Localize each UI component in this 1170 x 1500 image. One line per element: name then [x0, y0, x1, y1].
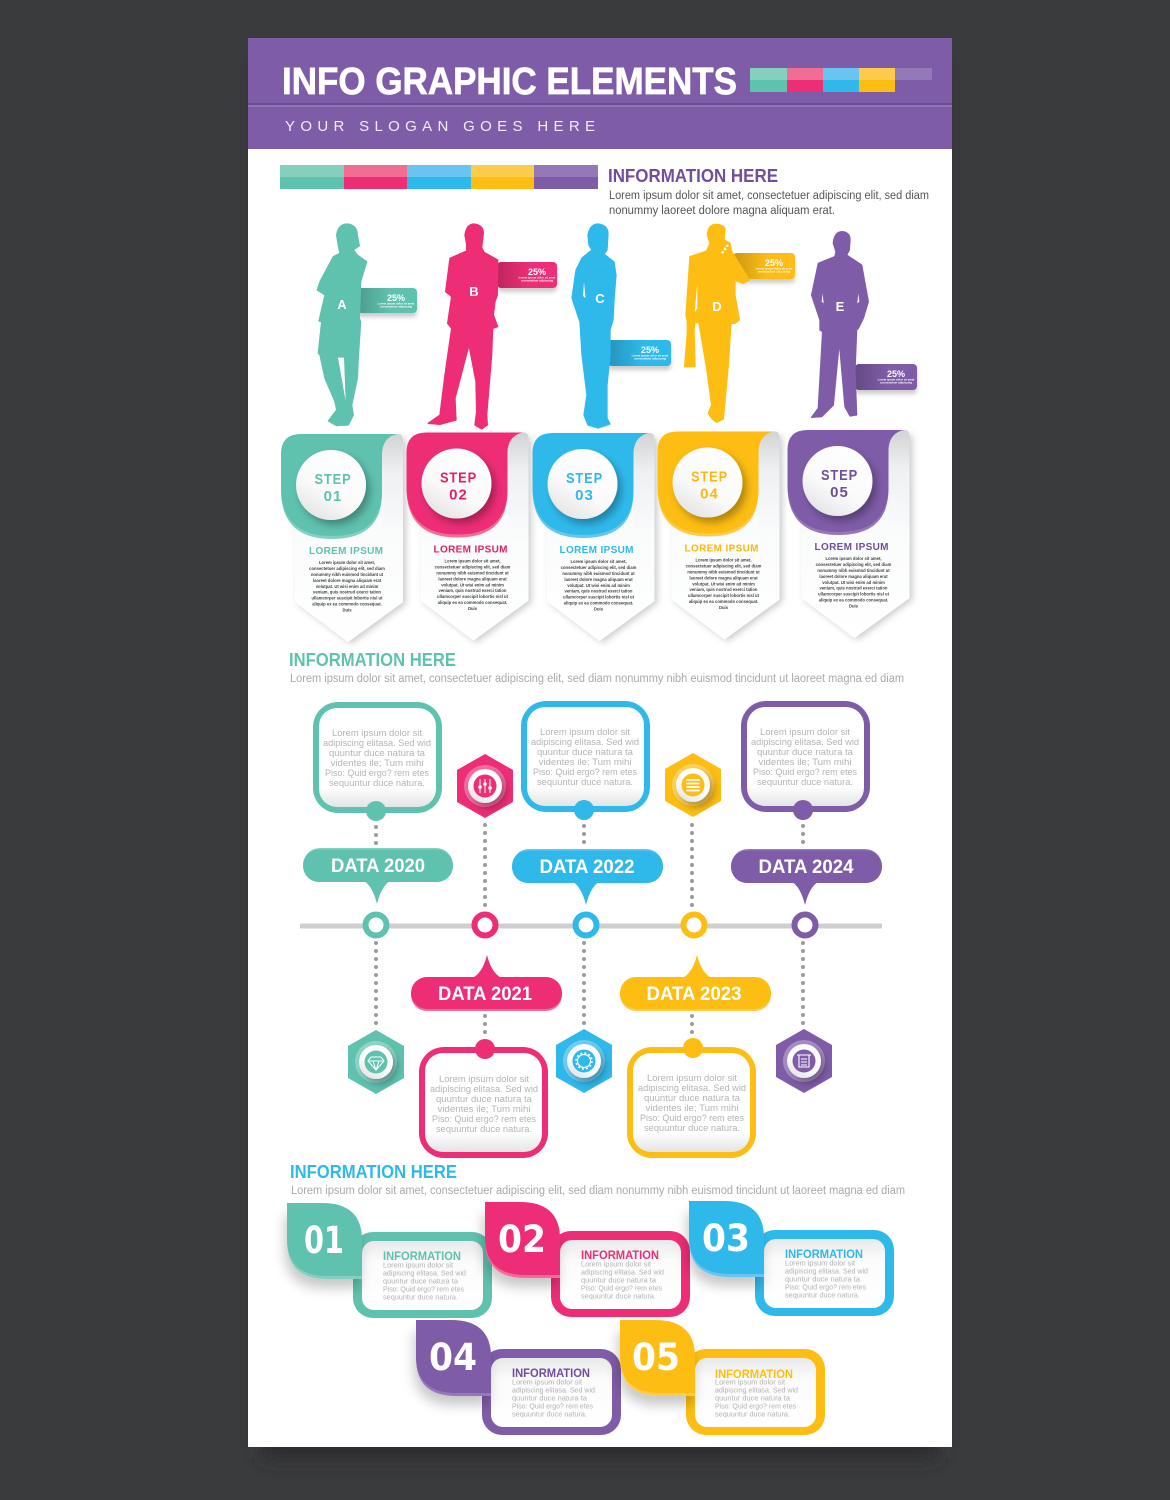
info box 2021: [419, 1039, 548, 1158]
tag A: Lorem ipsum dolor sit amet: [378, 302, 414, 306]
numbered item 05: quuntur duce natura ta: [715, 1396, 790, 1402]
numbered item 02: 02: [498, 1218, 546, 1261]
step card 01: Duis: [342, 607, 352, 612]
step card 02: ullamcorper suscipit lobortis nisl ut: [437, 594, 509, 599]
step card 01: veniam, quis nostrud exerci tation: [313, 590, 381, 595]
numbered item 02: [485, 1202, 690, 1317]
info box 2023: sequuntur duce natura.: [644, 1123, 740, 1133]
numbered item 01: adipiscing elitasa. Sed wid: [383, 1270, 466, 1278]
info box 2022: adipiscing elitasa. Sed wid: [531, 737, 639, 747]
step card 05: nonummy nibh euismod tincidunt ut: [817, 568, 890, 573]
tag B: 25%: [528, 267, 546, 277]
step card 02: veniam, quis nostrud exerci tation: [439, 588, 507, 593]
intro text: Lorem ipsum dolor sit amet, consectetuer adipiscing elit, sed diam: [609, 190, 929, 202]
numbered item 05: Piso: Quid ergo? rem etes: [715, 1404, 796, 1410]
numbered item 01: INFORMATION: [383, 1251, 461, 1263]
step card 03: 03: [575, 487, 594, 504]
step card 01: laoreet dolore magna aliquam erat: [313, 578, 382, 583]
numbered item 05: Lorem ipsum dolor sit: [715, 1380, 785, 1386]
timeline intro text: Lorem ipsum dolor sit amet, consectetuer adipiscing elit, sed diam nonummy nibh euismod tincidunt ut laoreet magna ed diam: [290, 673, 904, 685]
step card 03: veniam, quis nostrud exerci tation: [565, 589, 633, 594]
numbered item 01: Lorem ipsum dolor sit: [383, 1262, 453, 1270]
numbered item 01: Piso: Quid ergo? rem etes: [383, 1286, 464, 1294]
step card 02: [406, 432, 528, 640]
step card 02: Lorem ipsum dolor sit amet,: [444, 558, 501, 564]
step card 02: STEP: [440, 470, 477, 486]
silhouette E: [812, 232, 868, 417]
numbered item 02: Piso: Quid ergo? rem etes: [581, 1286, 662, 1292]
title: INFO GRAPHIC ELEMENTS: [282, 61, 737, 103]
silhouette C: C: [595, 291, 605, 306]
info box 2020: adipiscing elitasa. Sed wid: [323, 738, 431, 748]
numbered item 04: Piso: Quid ergo? rem etes: [512, 1404, 593, 1410]
label: data 2023: DATA 2023: [646, 984, 742, 1005]
label: data 2023: [620, 955, 771, 1011]
step card 05: ullamcorper suscipit lobortis nisl ut: [818, 592, 890, 596]
tag A: [357, 288, 417, 313]
step card 05: Duis: [849, 603, 859, 608]
info box 2024: quuntur duce natura ta: [757, 747, 853, 757]
info box 2022: sequuntur duce natura.: [537, 777, 633, 787]
info box 2021: Lorem ipsum dolor sit: [439, 1074, 530, 1084]
step card 02: 02: [449, 486, 468, 504]
numbered item 04: 04: [429, 1336, 477, 1379]
tag C: consectetuer adipiscing: [634, 356, 666, 360]
step card 02: consectetuer adipiscing elit, sed diam: [435, 564, 511, 570]
step card 04: volutpat. Ut wisi enim ad minim: [692, 581, 755, 586]
numbered item 01: [287, 1203, 492, 1318]
numbered item 01: 01: [304, 1219, 344, 1262]
info box 2021: videntes ile; Tum mihi: [438, 1104, 531, 1114]
step card 03: laoreet dolore magna aliquam erat: [564, 577, 633, 582]
numbered item 05: adipiscing elitasa. Sed wid: [715, 1388, 798, 1394]
info box 2024: videntes ile; Tum mihi: [758, 757, 852, 767]
label: data 2024: DATA 2024: [758, 857, 854, 878]
numbered item 02: quuntur duce natura ta: [581, 1278, 656, 1284]
step card 03: Lorem ipsum dolor sit amet,: [570, 559, 627, 564]
step card 04: STEP: [691, 468, 728, 486]
step card 05: LOREM IPSUM: [814, 542, 888, 553]
numbered item 02: adipiscing elitasa. Sed wid: [581, 1270, 664, 1276]
info box 2021: Piso: Quid ergo? rem etes: [432, 1114, 537, 1124]
info box 2020: quuntur duce natura ta: [329, 748, 425, 758]
silhouette B: B: [469, 284, 479, 299]
step card 03: volutpat. Ut wisi enim ad minim: [567, 583, 630, 588]
step card 01: Lorem ipsum dolor sit amet,: [319, 560, 375, 565]
timeline axis: [300, 924, 882, 928]
step card 05: 05: [830, 484, 849, 501]
label: data 2021: [411, 955, 562, 1011]
step card 04: ullamcorper suscipit lobortis nisl ut: [688, 593, 760, 598]
tag D: [733, 253, 795, 279]
step card 05: aliquip ex ea commodo consequat.: [819, 597, 888, 602]
page shadow: [262, 60, 938, 1458]
info box 2024: Lorem ipsum dolor sit: [760, 727, 851, 737]
step card 01: consectetuer adipiscing elit, sed diam: [309, 566, 385, 571]
silhouette B: [428, 224, 498, 429]
info box 2020: Lorem ipsum dolor sit: [332, 728, 423, 738]
step card 04: [658, 432, 780, 640]
dotted connectors: [376, 825, 803, 1033]
icon: equalizer hexagon: [457, 754, 513, 818]
numbered item 05: sequuntur duce natura.: [715, 1412, 790, 1418]
silhouette A: A: [337, 297, 347, 312]
label: data 2020: DATA 2020: [331, 856, 425, 877]
info box 2020: videntes ile; Tum mihi: [330, 758, 424, 768]
info box 2021: sequuntur duce natura.: [436, 1124, 532, 1134]
numbered item 05: [620, 1320, 825, 1435]
step card 02: nonummy nibh euismod tincidunt ut: [436, 570, 509, 576]
numbered item 04: INFORMATION: [512, 1368, 590, 1380]
step card 04: consectetuer adipiscing elit, sed diam: [686, 564, 762, 568]
label: data 2020: [303, 848, 453, 904]
step card 01: [281, 434, 403, 642]
info box 2024: adipiscing elitasa. Sed wid: [751, 737, 859, 747]
tag B: consectetuer adipiscing: [521, 278, 553, 282]
numbered item 03: Piso: Quid ergo? rem etes: [785, 1284, 866, 1292]
numbered item 04: [416, 1320, 621, 1435]
step card 03: STEP: [566, 470, 603, 487]
info box 2022: videntes ile; Tum mihi: [538, 757, 632, 767]
silhouette E: E: [836, 299, 845, 314]
step card 02: Duis: [468, 606, 478, 611]
numbered item 05: INFORMATION: [715, 1369, 793, 1381]
info box 2020: [313, 702, 442, 821]
info box 2023: adipiscing elitasa. Sed wid: [638, 1083, 746, 1093]
intro text: nonummy laoreet dolore magna aliquam erat.: [609, 205, 835, 217]
header band: [248, 38, 952, 149]
step card 03: Duis: [594, 606, 604, 611]
info box 2023: [627, 1038, 756, 1158]
step card 05: [788, 430, 910, 638]
label: data 2022: [512, 849, 663, 905]
heading: information here (numbered): INFORMATION HERE: [290, 1162, 457, 1182]
intro text: [609, 190, 929, 217]
tag E: 25%: [887, 369, 905, 379]
step card 05: veniam, quis nostrud exerci tation: [820, 586, 888, 591]
step card 05: laoreet dolore magna aliquam erat: [819, 574, 888, 579]
info box 2024: sequuntur duce natura.: [757, 777, 853, 787]
step card 03: [532, 433, 654, 641]
icon: gear hexagon: [556, 1029, 612, 1093]
info box 2022: [521, 701, 650, 820]
timeline rings: [366, 914, 816, 936]
tag D: consectetuer adipiscing: [758, 270, 790, 274]
numbered item 02: INFORMATION: [581, 1250, 659, 1262]
step card 02: LOREM IPSUM: [434, 544, 508, 556]
step card 04: nonummy nibh euismod tincidunt ut: [687, 570, 760, 574]
icon: coins hexagon: [665, 753, 721, 817]
step card 03: ullamcorper suscipit lobortis nisl ut: [563, 594, 635, 600]
silhouette D: D: [712, 299, 722, 314]
step card 01: aliquip ex ea commodo consequat.: [312, 601, 382, 606]
numbered item 04: quuntur duce natura ta: [512, 1396, 587, 1402]
tag D: Lorem ipsum dolor sit amet: [756, 266, 792, 270]
tag C: [608, 340, 671, 366]
heading: information here (top): INFORMATION HERE: [608, 166, 778, 186]
step card 04: LOREM IPSUM: [684, 544, 758, 554]
tag C: Lorem ipsum dolor sit amet: [632, 354, 668, 358]
step card 04: Lorem ipsum dolor sit amet,: [695, 558, 752, 562]
numbered item 04: adipiscing elitasa. Sed wid: [512, 1388, 595, 1394]
numbered item 03: quuntur duce natura ta: [785, 1276, 860, 1284]
step card 01: LOREM IPSUM: [309, 546, 383, 557]
label: data 2022: DATA 2022: [540, 857, 634, 878]
tag C: 25%: [641, 345, 659, 355]
page: [248, 38, 952, 1447]
step card 05: consectetuer adipiscing elit, sed diam: [816, 562, 892, 567]
step card 02: volutpat. Ut wisi enim ad minim: [441, 582, 504, 587]
info box 2020: sequuntur duce natura.: [329, 778, 425, 788]
tag B: Lorem ipsum dolor sit amet: [519, 276, 555, 280]
info box 2020: Piso: Quid ergo? rem etes: [325, 768, 430, 778]
info box 2023: videntes ile; Tum mihi: [646, 1103, 739, 1113]
step card 04: veniam, quis nostrud exerci tation: [690, 587, 758, 592]
tag B: [497, 262, 557, 288]
tag E: consectetuer adipiscing: [880, 380, 912, 384]
heading: information here (timeline): INFORMATION HERE: [289, 650, 456, 670]
info box 2024: [741, 701, 870, 820]
silhouette A: [317, 224, 367, 426]
icon: diamond hexagon: [348, 1030, 404, 1094]
info box 2023: quuntur duce natura ta: [644, 1093, 740, 1103]
label: data 2024: [731, 849, 882, 905]
numbered item 03: [689, 1201, 894, 1316]
step card 01: ullamcorper suscipit lobortis nisl ut: [312, 596, 383, 600]
info box 2022: quuntur duce natura ta: [537, 747, 633, 757]
colour bar: [280, 165, 598, 189]
slogan: YOUR SLOGAN GOES HERE: [285, 118, 595, 135]
step card 04: laoreet dolore magna aliquam erat: [689, 576, 758, 580]
step card 02: aliquip ex ea commodo consequat.: [438, 600, 507, 605]
step card 03: aliquip ex ea commodo consequat.: [564, 600, 633, 605]
numbered item 03: INFORMATION: [785, 1249, 863, 1261]
numbered item 03: sequuntur duce natura.: [785, 1292, 860, 1300]
numbered item 01: quuntur duce natura ta: [383, 1278, 458, 1286]
numbered item 04: Lorem ipsum dolor sit: [512, 1380, 582, 1386]
step card 03: LOREM IPSUM: [560, 545, 634, 556]
silhouette D: [685, 224, 749, 422]
header colour bar: [750, 68, 932, 92]
numbered intro text: Lorem ipsum dolor sit amet, consectetuer adipiscing elit, sed diam nonummy nibh euismod tincidunt ut laoreet magna ed diam: [291, 1185, 905, 1197]
step card 05: Lorem ipsum dolor sit amet,: [825, 556, 882, 561]
icon: document hexagon: [776, 1029, 832, 1093]
numbered item 02: sequuntur duce natura.: [581, 1294, 656, 1300]
step card 01: volutpat. Ut wisi enim ad minim: [316, 584, 379, 589]
tag A: consectetuer adipiscing: [380, 304, 412, 308]
numbered item 04: sequuntur duce natura.: [512, 1412, 587, 1418]
numbered item 03: adipiscing elitasa. Sed wid: [785, 1268, 868, 1276]
numbered item 05: 05: [632, 1336, 680, 1379]
tag E: [855, 364, 917, 390]
info box 2022: Piso: Quid ergo? rem etes: [533, 767, 638, 777]
step card 04: aliquip ex ea commodo consequat.: [689, 599, 758, 604]
numbered item 01: sequuntur duce natura.: [383, 1294, 458, 1302]
step card 04: Duis: [719, 605, 729, 610]
step card 04: 04: [700, 486, 719, 502]
info box 2024: Piso: Quid ergo? rem etes: [753, 767, 858, 777]
step card 03: nonummy nibh euismod tincidunt ut: [562, 571, 635, 576]
tag A: 25%: [387, 293, 405, 303]
step card 01: STEP: [314, 471, 352, 488]
info box 2022: Lorem ipsum dolor sit: [540, 727, 631, 737]
info box 2021: adipiscing elitasa. Sed wid: [430, 1084, 538, 1094]
tag E: Lorem ipsum dolor sit amet: [878, 378, 914, 382]
step card 05: volutpat. Ut wisi enim ad minim: [822, 580, 885, 585]
step card 03: consectetuer adipiscing elit, sed diam: [561, 565, 637, 570]
info box 2023: Piso: Quid ergo? rem etes: [640, 1113, 745, 1123]
step card 05: STEP: [821, 467, 858, 484]
info box 2023: Lorem ipsum dolor sit: [647, 1073, 738, 1083]
info box 2021: quuntur duce natura ta: [436, 1094, 532, 1104]
label: data 2021: DATA 2021: [438, 984, 532, 1005]
step card 01: 01: [324, 488, 342, 505]
step card 02: laoreet dolore magna aliquam erat: [438, 576, 507, 582]
numbered item 02: Lorem ipsum dolor sit: [581, 1262, 651, 1268]
tag D: 25%: [765, 258, 783, 268]
numbered item 03: 03: [702, 1217, 750, 1260]
step card 01: nonummy nibh euismod tincidunt ut: [311, 572, 384, 577]
silhouette C: [572, 224, 616, 428]
numbered item 03: Lorem ipsum dolor sit: [785, 1260, 855, 1268]
